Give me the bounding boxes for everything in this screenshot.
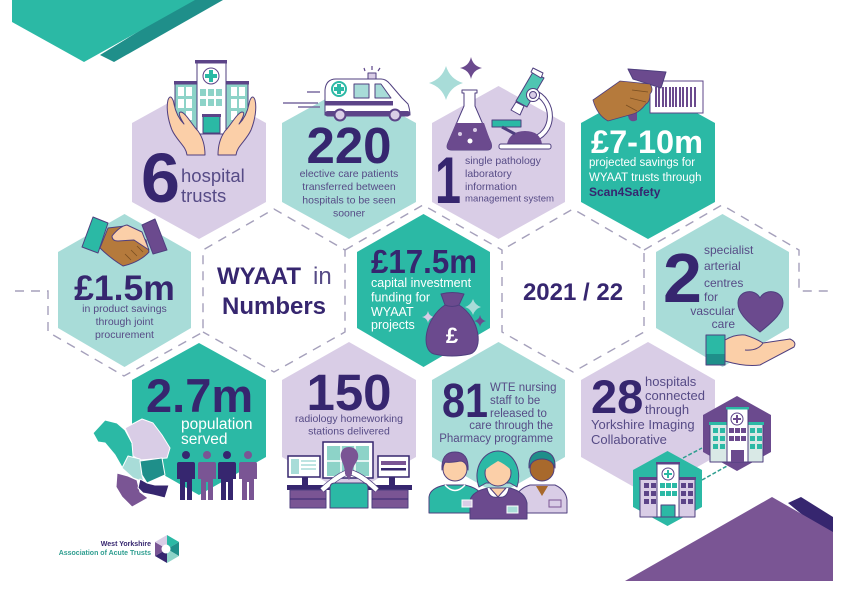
icon: ambulance [283, 66, 410, 120]
icon: teal hex hospital [633, 451, 702, 526]
icon: flask [447, 90, 492, 150]
label: radiology homeworking: radiology homeworking [295, 413, 403, 425]
big number: £7-10m: £7-10m [591, 124, 703, 160]
heading: 2021 / 22: 2021 / 22 [523, 279, 623, 306]
big number: £17.5m: £17.5m [371, 243, 477, 280]
label: product savings: through joint [96, 316, 153, 328]
map: West Yorkshire [93, 419, 170, 507]
label: capital investment: funding for [371, 290, 430, 304]
panel: £1.5m product savings [58, 214, 191, 367]
label: pathology system: single pathology [465, 155, 541, 167]
label: hospitals connected: connected [645, 388, 705, 403]
label: WTE nursing: WTE nursing [490, 382, 556, 394]
label: arterial centres: arterial [704, 259, 741, 273]
icon: handshake [82, 217, 167, 266]
big number: 6: 6 [141, 139, 180, 217]
logo: West Yorkshire Association of Acute Trusts: Association of Acute Trusts [59, 550, 151, 557]
big number: £1.5m: £1.5m [74, 268, 175, 308]
decorative corner: bottom right [625, 497, 833, 581]
icon: purple hex hospital [703, 396, 771, 471]
label: capital investment: WYAAT [371, 305, 414, 319]
label: hospitals connected: through [645, 402, 689, 417]
icon: three nurses [429, 451, 567, 519]
heading: WYAAT in Numbers: WYAAT [217, 263, 301, 290]
label: hospitals connected: Yorkshire Imaging [591, 417, 695, 432]
label: hospitals connected: Collaborative [591, 432, 667, 447]
label: pathology system: management system [465, 194, 554, 204]
big number: 2.7m: 2.7m [146, 369, 253, 422]
big number: 28: 28 [591, 370, 643, 423]
connector dashes [683, 448, 727, 480]
icon: money bag: £ [446, 323, 459, 348]
label: pathology system: information [465, 181, 517, 193]
label: projected savings: projected savings for [589, 157, 695, 169]
logo: West Yorkshire Association of Acute Trusts [59, 535, 179, 563]
label: elective care patients: transferred between [302, 181, 396, 193]
big number: 81: 81 [442, 375, 488, 428]
heading: WYAAT in Numbers: Numbers [222, 293, 326, 320]
label: vascular care: vascular [690, 304, 735, 318]
label: population served: served [181, 431, 228, 448]
icon: four people [177, 451, 257, 500]
icon: radiologist at desk [287, 442, 412, 508]
icon: sparkles [429, 57, 482, 100]
panel: 6 hospital trusts [132, 60, 266, 239]
decorative corner: top left [12, 0, 223, 62]
label: WTE nursing: released to [490, 408, 547, 420]
label: elective care patients: elective care patients [300, 168, 398, 180]
label: capital investment: projects [371, 318, 415, 332]
label: elective care patients: sooner [333, 208, 366, 220]
label: arterial centres: for [704, 290, 718, 304]
big number: 2: 2 [663, 239, 702, 317]
big number: 1: 1 [435, 143, 461, 217]
icon: heart in hand [706, 292, 795, 366]
label: vascular care: care [712, 317, 735, 331]
dashed hexagon lattice [15, 205, 833, 376]
panel: £17.5m capital funding [357, 214, 490, 367]
icon: barcode scanner [593, 69, 703, 121]
icon: money bag [422, 292, 486, 356]
label: projected savings: WYAAT trusts through [589, 172, 701, 184]
label: population served: population [181, 416, 253, 433]
label: WTE nursing: staff to be [490, 395, 540, 407]
label: arterial centres: centres [704, 276, 743, 290]
label: hospitals connected: hospitals [645, 374, 696, 389]
label: pharmacy programme: Pharmacy programme [439, 433, 553, 445]
panel: 2.7m population [93, 343, 266, 507]
label: hospital trusts: hospital [181, 165, 245, 186]
panel: 2 arterial centres [656, 214, 795, 367]
heading: WYAAT in Numbers: in [313, 263, 332, 290]
label: pathology system: laboratory [465, 168, 512, 180]
label: elective care patients: hospitals to be seen [302, 194, 396, 206]
panel: 1 pathology system [429, 57, 565, 239]
label: capital investment: capital investment [371, 276, 471, 290]
panel: £7-10m savings [581, 69, 715, 239]
label: hospital trusts: trusts [181, 185, 226, 206]
label: Scan4Safety: Scan4Safety [589, 185, 661, 199]
panel: 81 nursing staff [429, 342, 567, 519]
label: pharmacy programme: care through the [469, 420, 553, 432]
panel: 220 elective care patients [282, 66, 416, 239]
icon: microscope [492, 68, 551, 149]
label: arterial centres: specialist [704, 243, 753, 257]
logo: West Yorkshire Association of Acute Trusts: West Yorkshire [101, 541, 151, 548]
panel: 150 radiology stations [282, 342, 416, 508]
label: radiology homeworking: stations delivered [308, 426, 390, 438]
label: product savings: procurement [95, 329, 154, 341]
icon: hospital in hands [167, 60, 256, 155]
panel: 28 hospitals connected [581, 342, 771, 526]
big number: 220: 220 [306, 117, 392, 174]
label: product savings: in product savings [82, 303, 167, 315]
big number: 150: 150 [306, 364, 392, 421]
